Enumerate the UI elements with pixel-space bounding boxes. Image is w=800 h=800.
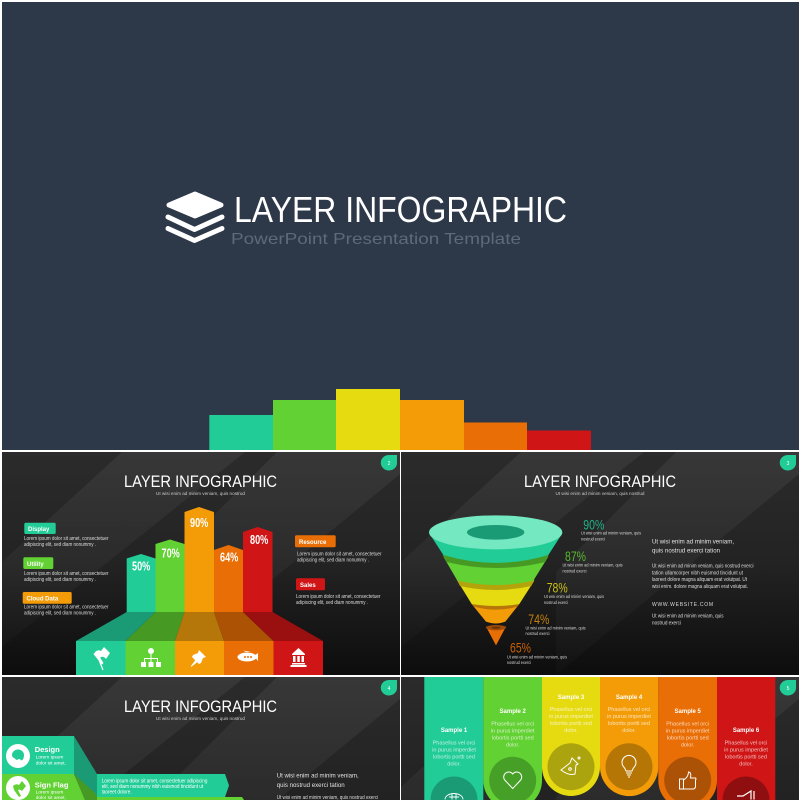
layer: Design: dolor sit amet, [36,760,66,766]
arrow bar: teal: elit, sed diam nonummy nibh euismod tincidunt ut [102,784,204,790]
column: Sample 6: Sample 6 [733,728,760,734]
column: Sample 1: Sample 1 [441,728,468,734]
column: Sample 1: dolor. [447,762,461,768]
panel: bar chart slide [2,452,400,675]
column: Sample 2: in purus imperdiet [491,728,535,734]
column: Sample 2: Sample 2 [500,709,527,715]
stat: 65%: nostrud exerci [507,660,531,665]
left label: Utility: Utility [27,562,44,568]
column: Sample 1: lobortis portti sed [433,754,475,760]
right label: Sales: Sales [300,583,316,589]
column: Sample 1 [424,677,483,800]
text block: description: Ut wisi enim ad minim veniam, quis nostrud exerci [652,564,754,570]
left label: Cloud Data: adipiscing elit, sed diam nonummy . [24,610,96,616]
column: Sample 6: dolor. [739,762,753,768]
bar: 80%: 80% [250,532,269,547]
left label: Display: Lorem ipsum dolor sit amet, consectetuer [24,536,109,542]
icon: push pin [191,650,206,666]
left label: Cloud Data: Lorem ipsum dolor sit amet, consectetuer [24,604,109,610]
panel: funnel slide [401,452,799,675]
left label: Display [24,523,109,548]
left label: Utility: adipiscing elit, sed diam nonummy . [24,577,96,583]
bar chart [127,507,272,612]
bar: 70%: 70% [162,545,180,560]
page number badge: 4 [388,686,391,692]
column: Sample 3: Sample 3 [558,695,585,701]
stat: 90%: Ut wisi enim ad minim veniam, quis [581,531,641,536]
right label: Resource: Resource [299,540,327,546]
icon: flask [561,757,580,774]
stat: 78%: Ut wisi enim ad minim veniam, quis [544,594,604,599]
cover subtitle: PowerPoint Presentation Template [231,231,521,248]
arrow bar: green [97,797,244,800]
column: Sample 3: in purus imperdiet [549,714,593,720]
right label: Resource: adipiscing elit, sed diam nonummy . [297,558,369,564]
page number badge: 2 [388,461,391,467]
stat: 78% [544,581,604,605]
layer: Sign Flag: Lorem ipsum [36,790,63,796]
left label: Display: adipiscing elit, sed diam nonummy . [24,542,96,548]
text block: description: quis nostrud exerci tation [652,548,720,554]
column: Sample 4: dolor. [622,728,636,734]
column: Sample 6: lobortis portti sed [725,754,767,760]
column: Sample 1: in purus imperdiet [432,748,476,754]
left label: Cloud Data: Cloud Data [26,596,59,602]
column: Sample 2: dolor. [506,742,520,748]
column: Sample 5: Phasellus vel orci [666,722,709,728]
bar: 50% [127,554,156,612]
icon: bank [290,648,306,667]
left label: Cloud Data [23,592,109,616]
bar: 70% [156,540,184,612]
left label: Utility [23,557,109,583]
arrow bar: teal: laoreet dolore. [102,789,132,795]
column: Sample 5: Sample 5 [675,709,702,715]
funnel chart [429,515,562,645]
stat: 74%: nostrud exerci [526,631,550,636]
arrow bar: teal: Lorem ipsum dolor sit amet, consectetuer adipiscing [102,778,208,784]
column: Sample 3: lobortis portti sed [550,721,592,727]
icon: airplane [238,650,258,662]
layer: Sign Flag [2,774,85,800]
column: Sample 6: Phasellus vel orci [725,740,767,746]
stat: 90% [581,517,641,541]
slide subtitle: Ut wisi enim ad minim veniam, quis nostrud [156,491,245,497]
text block: description: Ut wisi enim ad minim veniam, quis [652,614,724,620]
stat: 87%: nostrud exerci [562,568,587,573]
stat: 87% [562,549,622,573]
column: Sample 6: in purus imperdiet [724,748,768,754]
column: Sample 4: in purus imperdiet [607,714,651,720]
column: Sample 2: Phasellus vel orci [491,722,534,728]
column: Sample 5: in purus imperdiet [666,728,710,734]
right label: Resource [295,535,382,564]
icon: megaphone [737,791,754,800]
page number badge [780,455,796,470]
page number badge: 3 [787,461,790,467]
layer: Design: Lorem ipsum [36,754,63,760]
layer: Design: Design [35,745,60,754]
text block: description: laoreet dolore magna aliquam erat volutpat. Ut [652,577,748,583]
text block: description: WWW.WEBSITE.COM [652,602,713,608]
column: Sample 4: Phasellus vel orci [608,707,650,713]
left label: Utility: Lorem ipsum dolor sit amet, consectetuer [24,571,109,577]
column: Sample 4 [600,677,658,796]
text block: description: quis nostrud exerci tation [277,782,345,789]
icon base row [76,641,323,675]
bar: 90%: 90% [190,515,209,530]
stat: 74%: Ut wisi enim ad minim veniam, quis [526,626,586,630]
panel: layered list slide [2,677,400,800]
column: Sample 1: Phasellus vel orci [433,740,475,746]
left label: Display: Display [28,527,50,533]
stat: 65%: Ut wisi enim ad minim veniam, quis [507,654,567,659]
slide title: LAYER INFOGRAPHIC [124,473,277,491]
icon: flag [13,781,26,797]
stat: 78%: 78% [547,581,568,596]
column: Sample 2: lobortis portti sed [492,736,534,742]
column: Sample 2 [483,677,542,800]
stat: 78%: nostrud exerci [544,600,568,605]
text block: description [652,538,754,626]
column: Sample 4: lobortis portti sed [608,721,650,727]
column: Sample 5: lobortis portti sed [667,736,709,742]
page number badge [381,455,397,470]
text block: description: wisi enim. dolore magna aliquam erat volutpat. [652,584,748,590]
page number badge [381,680,397,696]
cover icon: layer stack [168,194,222,240]
text block: description [277,773,378,800]
perspective floor [76,612,323,641]
page number badge: 5 [787,686,790,692]
icon: light bulb [622,755,636,777]
right label: Sales [296,578,381,606]
icon: thumbs up [680,772,696,789]
slide subtitle: Ut wisi enim ad minim veniam, quis nostrud [556,491,645,497]
text block: description: tation ullamcorper nibh euismod tincidunt ut [652,570,744,576]
stat: 65%: 65% [510,641,531,656]
stat: 74%: 74% [528,612,549,627]
text block: description: Ut wisi enim ad minim veniam, [277,773,359,780]
column: Sample 4: Sample 4 [616,695,643,701]
right label: Sales: Lorem ipsum dolor sit amet, consectetuer [296,594,381,600]
bar: 50%: 50% [132,559,151,574]
stat: 74% [526,612,586,636]
cover title: LAYER INFOGRAPHIC [234,189,567,230]
icon: globe [445,794,463,800]
arrow bar: teal [97,774,229,797]
stat: 90%: nostrud exerci [581,536,605,541]
layer fold shadows [74,736,97,800]
column: Sample 3: dolor. [564,728,578,734]
text block: description: Ut wisi enim ad minim veniam, [652,538,734,545]
layer: Design [2,736,74,774]
slide subtitle: Ut wisi enim ad minim veniam, quis nostrud [156,716,245,722]
column: Sample 3 [542,677,600,796]
stat: 87%: Ut wisi enim ad minim veniam, quis [562,562,622,568]
bar: 64%: 64% [220,550,239,565]
stat: 87%: 87% [565,549,586,564]
panel: sample columns slide [401,677,799,800]
cover colour steps [209,389,591,450]
slide title: LAYER INFOGRAPHIC [524,473,676,491]
bar: 64% [214,545,243,612]
right label: Sales: adipiscing elit, sed diam nonummy . [296,600,368,606]
slide title: LAYER INFOGRAPHIC [124,698,277,716]
column: Sample 3: Phasellus vel orci [550,707,592,713]
page number badge [780,680,796,696]
stat: 90%: 90% [583,517,604,532]
icon: hierarchy [141,648,161,667]
icon: heart [504,772,522,788]
icon: flag [94,647,110,670]
stat: 65% [507,641,567,665]
layer: Sign Flag: Sign Flag [35,781,69,790]
icon: palette [12,750,24,760]
text block: description: nostrud exerci [652,620,681,626]
column: Sample 5 [658,677,717,800]
right label: Resource: Lorem ipsum dolor sit amet, consectetuer [297,552,382,558]
bar: 80% [243,527,272,612]
cover panel [2,2,799,450]
column: Sample 5: dolor. [681,742,695,748]
bar: 90% [184,507,214,612]
column: Sample 6 [717,677,775,800]
